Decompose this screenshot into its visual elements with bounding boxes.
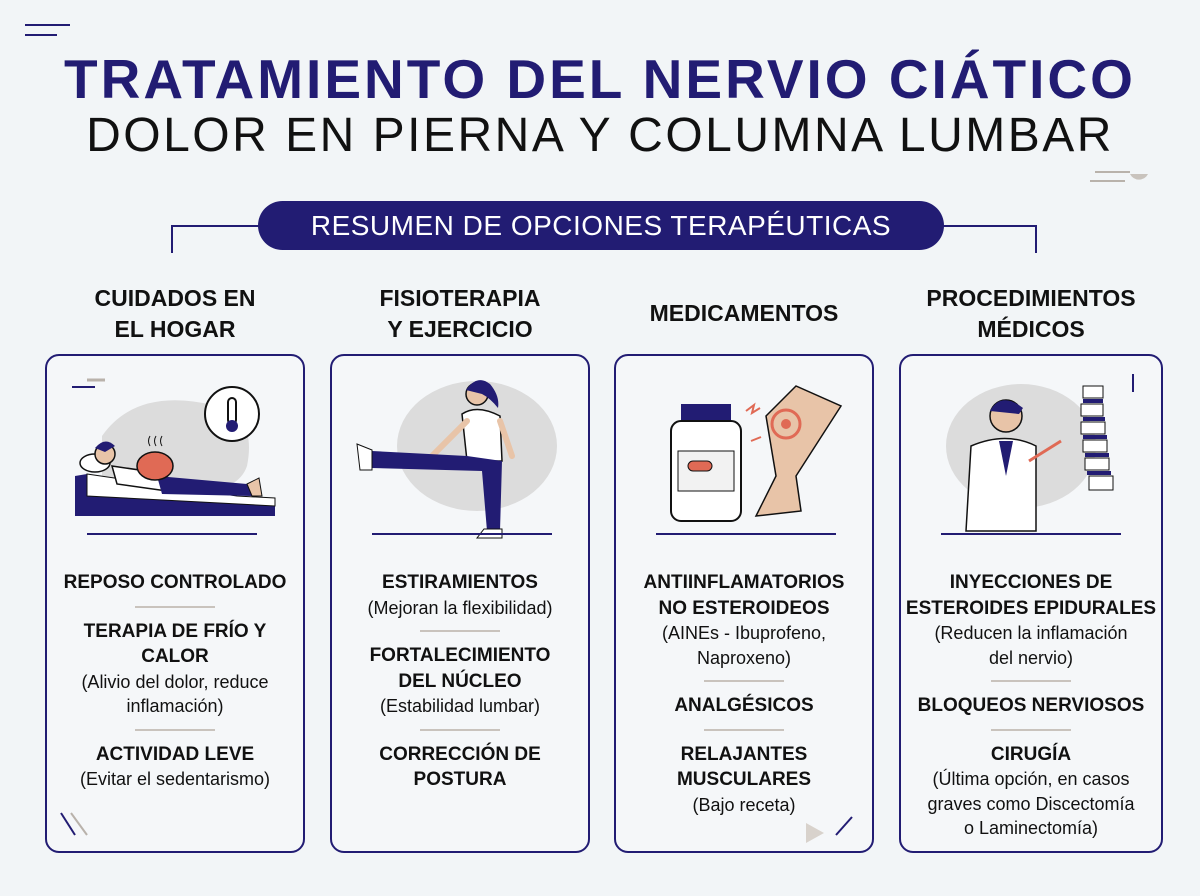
heading: cuidados: CUIDADOS EN bbox=[94, 285, 256, 311]
heading: fisioterapia bbox=[379, 285, 540, 342]
text: cuidados: REPOSO CONTROLADO TERAPIA DE FRÍO Y bbox=[64, 572, 286, 642]
decorative lines right bbox=[1090, 171, 1148, 182]
heading: fisioterapia: Y EJERCICIO bbox=[387, 316, 533, 342]
text: medicamentos: (AINEs - Ibuprofeno, bbox=[662, 623, 826, 643]
text: fisioterapia: (Estabilidad lumbar) CORRECCIÓN DE bbox=[379, 696, 541, 764]
text: cuidados: (Alivio del dolor, reduce bbox=[81, 672, 269, 692]
text: procedimientos: (Última opción, en casos bbox=[932, 769, 1130, 789]
text: medicamentos bbox=[644, 572, 844, 815]
subtitle: DOLOR EN PIERNA Y COLUMNA LUMBAR bbox=[86, 109, 1114, 162]
section pill bbox=[258, 201, 944, 250]
text: procedimientos bbox=[906, 572, 1156, 838]
text: fisioterapia bbox=[367, 572, 553, 790]
text: procedimientos: ESTEROIDES EPIDURALES bbox=[906, 598, 1156, 618]
text: medicamentos: (Bajo receta) bbox=[692, 794, 796, 814]
illustration: resting person bbox=[72, 378, 276, 516]
text: medicamentos: ANTIINFLAMATORIOS bbox=[644, 572, 844, 593]
text: procedimientos: (Reducen la inflamación bbox=[934, 623, 1128, 643]
panel: medicamentos bbox=[614, 354, 874, 853]
decorative lines top-left bbox=[25, 24, 70, 36]
heading: procedimientos: PROCEDIMIENTOS bbox=[926, 285, 1136, 311]
heading: cuidados bbox=[94, 285, 256, 342]
text: cuidados: inflamación) ACTIVIDAD LEVE bbox=[96, 696, 254, 764]
title: TRATAMIENTO DEL NERVIO CIÁTICO bbox=[64, 48, 1136, 110]
heading: procedimientos: MÉDICOS bbox=[977, 316, 1085, 342]
illustration: doctor and spine bbox=[946, 374, 1134, 532]
text: fisioterapia: DEL NÚCLEO bbox=[398, 670, 522, 692]
text: procedimientos: graves como Discectomía bbox=[927, 794, 1135, 814]
text: cuidados: CALOR bbox=[141, 646, 209, 667]
panel: procedimientos bbox=[899, 354, 1163, 853]
heading: medicamentos: MEDICAMENTOS bbox=[650, 300, 838, 326]
text: cuidados: (Evitar el sedentarismo) bbox=[80, 769, 270, 789]
panel: cuidados en el hogar bbox=[45, 354, 305, 853]
heading: fisioterapia: FISIOTERAPIA bbox=[379, 285, 540, 311]
heading: cuidados: EL HOGAR bbox=[114, 316, 235, 342]
illustration: stretching woman bbox=[356, 380, 557, 538]
text: fisioterapia: POSTURA bbox=[414, 769, 506, 790]
illustration: pill bottle and knee bbox=[670, 385, 842, 522]
panel: fisioterapia bbox=[330, 354, 590, 853]
section pill: RESUMEN DE OPCIONES TERAPÉUTICAS bbox=[311, 210, 891, 241]
text: medicamentos: Naproxeno) ANALGÉSICOS RELAJANTES bbox=[674, 648, 814, 764]
heading: procedimientos bbox=[926, 285, 1136, 342]
text: medicamentos: MUSCULARES bbox=[677, 769, 811, 790]
text: fisioterapia: (Mejoran la flexibilidad) FORTALECIMIENTO bbox=[367, 598, 553, 666]
text: cuidados bbox=[64, 572, 286, 789]
text: fisioterapia: ESTIRAMIENTOS bbox=[382, 572, 538, 593]
text: procedimientos: INYECCIONES DE bbox=[950, 572, 1112, 593]
text: procedimientos: o Laminectomía) bbox=[964, 818, 1098, 838]
text: procedimientos: del nervio) BLOQUEOS NERVIOSOS CIRUGÍA bbox=[918, 648, 1144, 764]
text: medicamentos: NO ESTEROIDEOS bbox=[658, 598, 830, 618]
